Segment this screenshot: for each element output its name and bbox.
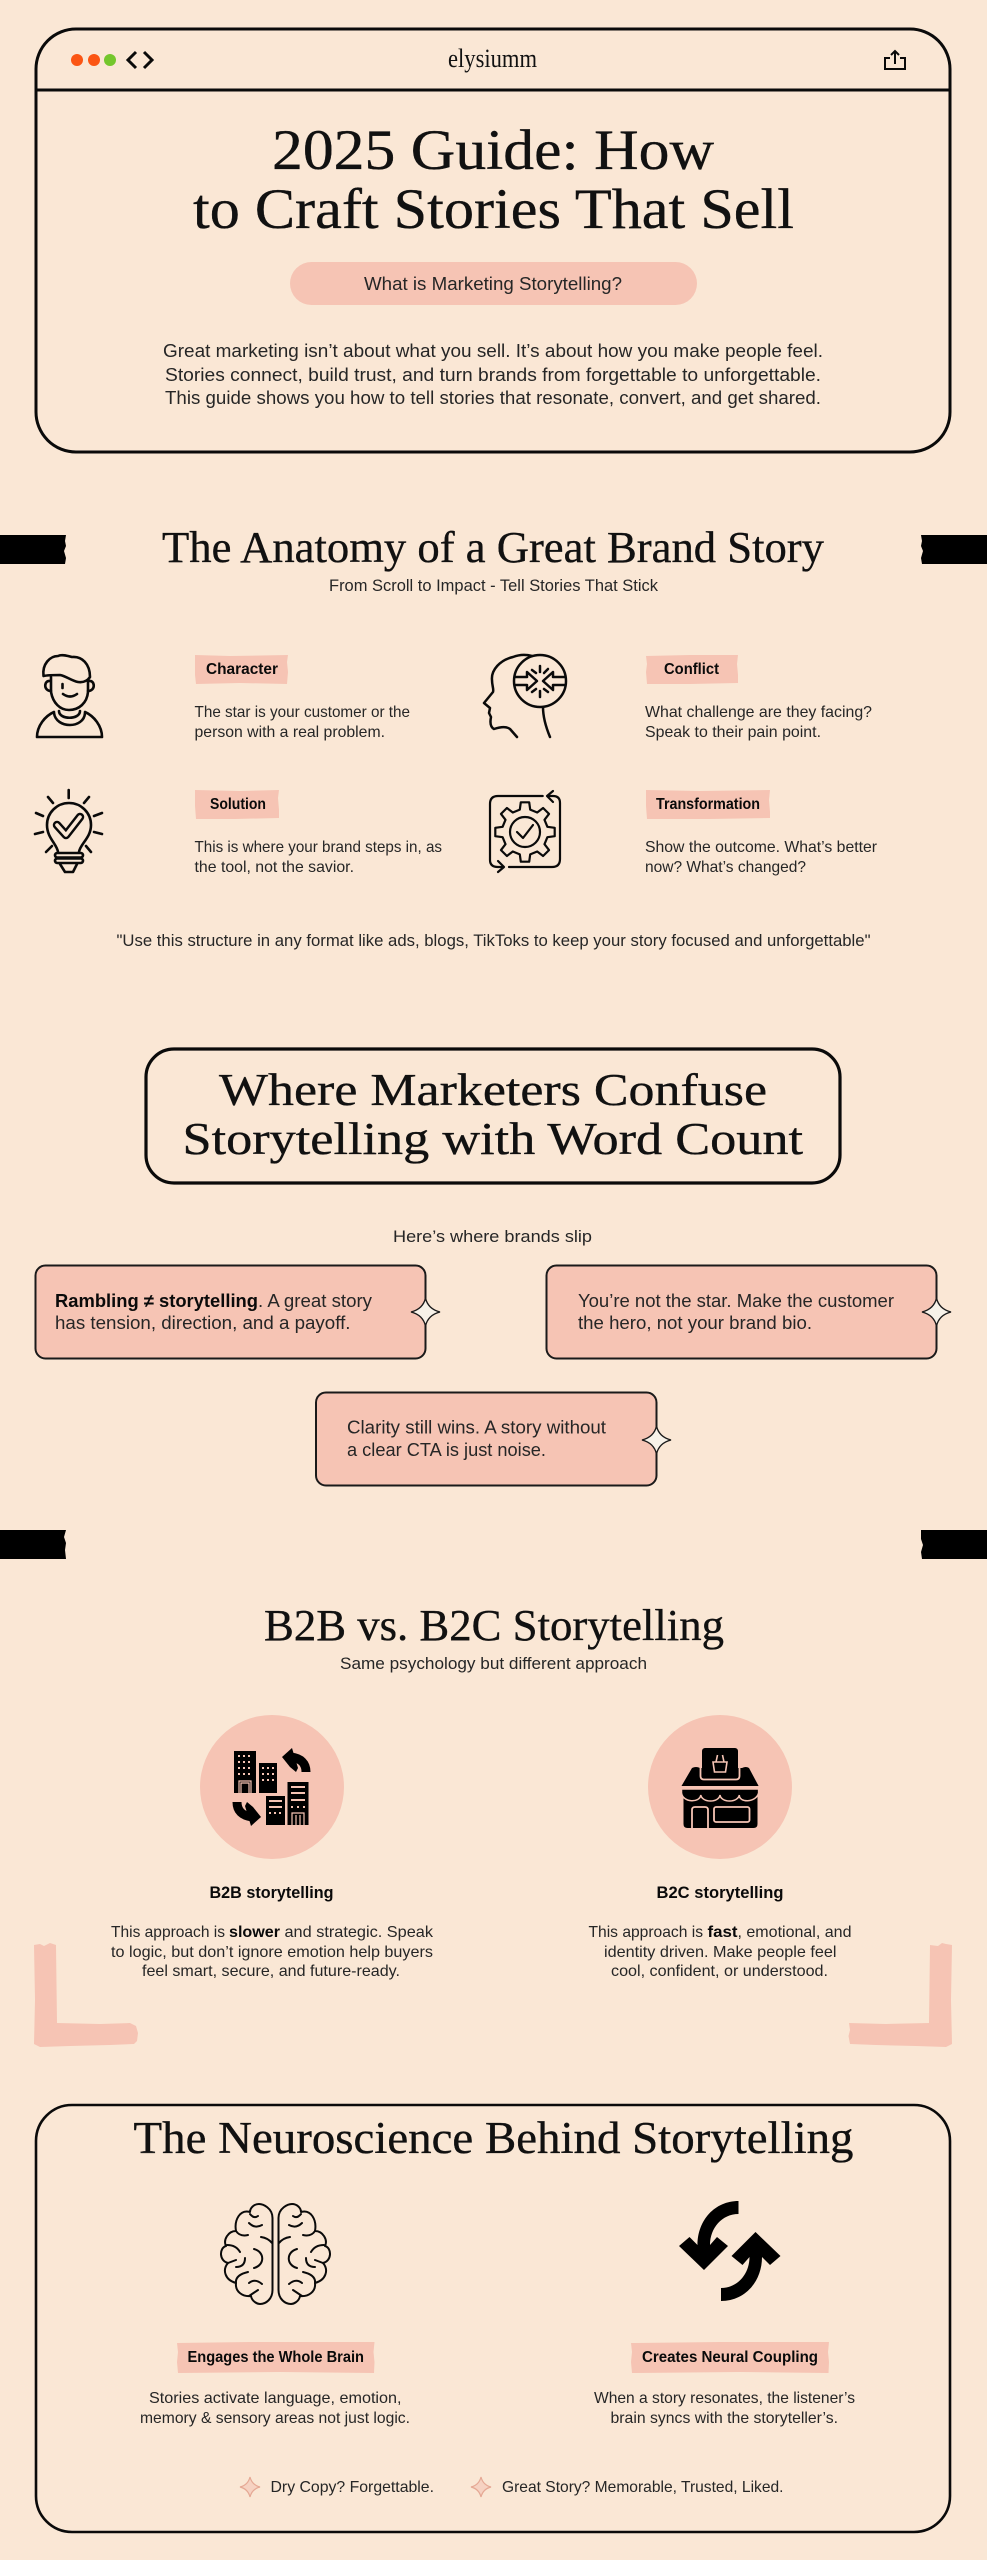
text: transformation description: now? What’s changed? <box>645 859 806 876</box>
card: rambling: has tension, direction, and a payoff. <box>55 1312 350 1333</box>
tag: conflict: Conflict <box>664 661 719 678</box>
card: clarity still wins <box>316 1392 671 1486</box>
tag: transformation: Transformation <box>656 796 760 813</box>
text: whole brain description <box>140 2390 410 2427</box>
building tall left <box>234 1751 256 1793</box>
heading: anatomy of a great brand story: From Scroll to Impact - Tell Stories That Stick <box>329 577 659 595</box>
tag: conflict <box>646 655 738 684</box>
column: b2c storytelling <box>588 1883 852 1980</box>
column: b2c storytelling: This approach is <box>588 1924 703 1941</box>
card: rambling <box>36 1266 440 1358</box>
text: whole brain description: memory & sensory areas not just logic. <box>140 2410 410 2427</box>
intro text: This guide shows you how to tell stories that resonate, convert, and get shared. <box>165 387 821 408</box>
text: conflict description: What challenge are they facing? <box>645 704 872 721</box>
tag: solution: Solution <box>210 796 266 813</box>
text: conflict description <box>645 704 872 741</box>
callout: dry copy: Dry Copy? Forgettable. <box>270 2479 434 2496</box>
heading: The Neuroscience Behind Storytelling <box>134 2113 854 2163</box>
column: b2b storytelling: This approach is <box>111 1924 225 1941</box>
text: whole brain description: Stories activate language, emotion, <box>149 2390 402 2407</box>
pill: what is marketing storytelling: What is Marketing Storytelling? <box>364 274 622 294</box>
tape: right black strip 2 <box>921 1530 987 1559</box>
icon: conflict head <box>484 655 566 737</box>
text: neural coupling description: When a story resonates, the listener’s <box>594 2390 855 2407</box>
logo: elysiumm <box>448 44 537 73</box>
pill: what is marketing storytelling <box>290 262 697 305</box>
shop sign with basket <box>700 1748 740 1780</box>
panel: where marketers confuse heading: Storytelling with Word Count <box>182 1113 803 1164</box>
card: you're not the star: the hero, not your brand bio. <box>578 1312 812 1333</box>
callout: great story: Great Story? Memorable, Trusted, Liked. <box>502 2479 784 2496</box>
card: you're not the star: You’re not the star. Make the customer <box>578 1290 894 1311</box>
tag: transformation <box>646 790 770 819</box>
text: neural coupling description <box>594 2390 855 2427</box>
icon: transformation gear <box>490 791 560 872</box>
icon: share <box>885 51 905 69</box>
column: b2b storytelling: B2B storytelling <box>210 1883 334 1902</box>
panel: browser window header <box>36 29 950 452</box>
intro text: Great marketing isn’t about what you sell. It’s about how you make people feel. <box>163 340 823 361</box>
bracket: pink brush corner right <box>848 1943 952 2047</box>
icon: b2c shop in circle <box>648 1715 792 1859</box>
icon: code chevrons <box>128 52 152 68</box>
text: solution description: This is where your brand steps in, as <box>194 839 442 856</box>
title <box>193 119 794 241</box>
text: transformation description: Show the outcome. What’s better <box>645 839 878 856</box>
panel: where marketers confuse heading <box>146 1049 840 1183</box>
building short right <box>266 1796 285 1825</box>
heading: anatomy of a great brand story: The Anatomy of a Great Brand Story <box>162 523 824 572</box>
column: b2b storytelling: slower <box>229 1924 280 1941</box>
icon: coupling arrows <box>679 2201 780 2301</box>
text: character description: person with a real problem. <box>194 724 385 741</box>
panel: where marketers confuse heading: Where Marketers Confuse <box>219 1064 767 1115</box>
icon: sparkle <box>642 1426 671 1454</box>
tag: character <box>195 655 288 684</box>
column: b2b storytelling: to logic, but don’t ignore emotion help buyers <box>111 1944 433 1961</box>
tag: solution <box>195 790 279 819</box>
text: here's where brands slip: Here’s where brands slip <box>393 1227 592 1246</box>
building tall right <box>288 1782 308 1825</box>
icon: character person <box>37 655 102 737</box>
tag: engages the whole brain <box>177 2342 374 2373</box>
card: clarity still wins: Clarity still wins. A story without <box>347 1416 606 1438</box>
intro text: Stories connect, build trust, and turn brands from forgettable to unforgettable. <box>165 364 821 385</box>
text: conflict description: Speak to their pain point. <box>645 724 821 741</box>
icon: b2b buildings in circle <box>200 1715 344 1859</box>
title: to Craft Stories That Sell <box>193 178 794 241</box>
heading: b2b vs b2c: Same psychology but different approach <box>340 1655 647 1673</box>
heading: b2b vs b2c: B2B vs. B2C Storytelling <box>264 1601 724 1650</box>
heading: b2b vs b2c <box>264 1601 724 1673</box>
right hemisphere <box>278 2204 330 2304</box>
tag: creates neural coupling <box>631 2342 829 2373</box>
panel: neuroscience behind storytelling <box>36 2105 950 2532</box>
icon: brain <box>221 2204 330 2304</box>
tape: left black strip 1 <box>0 535 66 564</box>
column: b2c storytelling: cool, confident, or understood. <box>611 1963 828 1980</box>
icon: sparkle <box>411 1298 440 1326</box>
column: b2c storytelling: identity driven. Make people feel <box>604 1944 836 1961</box>
tag: engages the whole brain: Engages the Whole Brain <box>188 2349 364 2366</box>
quote: "Use this structure in any format like ads, blogs, TikToks to keep your story focused and unforgettable" <box>116 931 870 950</box>
text: transformation description <box>645 839 878 876</box>
tape: right black strip 1 <box>921 535 987 564</box>
card: rambling: . A great story <box>258 1290 373 1311</box>
arrow top right <box>282 1748 306 1772</box>
left hemisphere <box>221 2204 272 2304</box>
shop door and window <box>692 1807 750 1828</box>
building small left <box>259 1763 277 1793</box>
shop awning <box>682 1789 759 1801</box>
icon: sparkle <box>922 1298 951 1326</box>
column: b2c storytelling: , emotional, and <box>738 1924 852 1941</box>
tag: creates neural coupling: Creates Neural Coupling <box>642 2349 818 2366</box>
text: solution description: the tool, not the savior. <box>194 859 354 876</box>
tag: character: Character <box>206 661 278 678</box>
tape: left black strip 2 <box>0 1530 66 1559</box>
title: 2025 Guide: How <box>272 119 714 182</box>
text: solution description <box>194 839 442 876</box>
column: b2c storytelling: B2C storytelling <box>656 1883 784 1902</box>
arrow bottom left <box>237 1802 261 1826</box>
window buttons <box>71 54 116 66</box>
column: b2c storytelling: fast <box>708 1924 738 1941</box>
card: clarity still wins: a clear CTA is just noise. <box>347 1439 546 1460</box>
icon: solution light bulb <box>35 790 102 872</box>
shop body <box>684 1796 758 1828</box>
column: b2b storytelling: and strategic. Speak <box>284 1924 434 1941</box>
text: character description: The star is your customer or the <box>194 704 410 721</box>
card: you're not the star <box>546 1266 951 1358</box>
heading: anatomy of a great brand story <box>162 523 824 595</box>
bracket: pink brush corner left <box>34 1943 138 2047</box>
shop roof <box>682 1767 759 1786</box>
column: b2b storytelling <box>111 1883 434 1980</box>
intro text <box>163 340 823 408</box>
text: character description <box>194 704 410 741</box>
column: b2b storytelling: feel smart, secure, and future-ready. <box>142 1963 400 1980</box>
card: rambling: Rambling ≠ storytelling <box>55 1290 258 1311</box>
text: neural coupling description: brain syncs with the storyteller’s. <box>610 2410 838 2427</box>
